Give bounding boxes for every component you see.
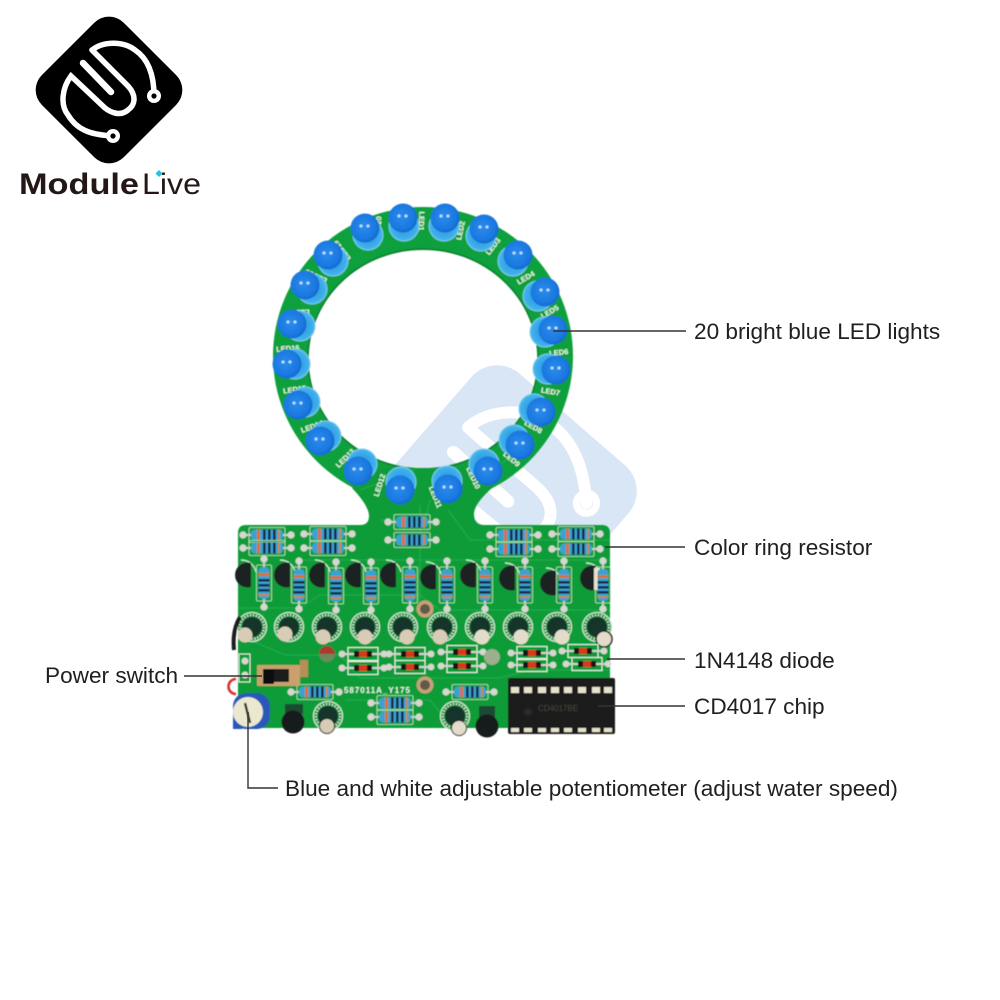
logo wordmark: Module [19, 168, 139, 201]
white tab by last transistor [594, 568, 600, 590]
LED labels: LED10 [464, 465, 482, 490]
LED labels: LED15 [282, 383, 307, 396]
product: PCB with LED ring [229, 204, 615, 738]
neck resistors [384, 514, 440, 548]
PCB board [238, 468, 610, 728]
LED labels: LED13 [334, 447, 357, 470]
black wire [234, 617, 240, 650]
LED labels: LED9 [501, 449, 522, 469]
lower horizontal resistors [287, 684, 498, 724]
board holes and copper rings [319, 600, 500, 694]
LED labels: LED4 [515, 269, 537, 287]
PCB ring inner shade [308, 249, 538, 469]
LED labels: LED1 [417, 211, 426, 231]
board marking: 587011A_Y175 [344, 686, 411, 695]
LED labels: LED7 [540, 385, 561, 398]
PCB ring [273, 207, 573, 505]
capacitor row [238, 612, 612, 647]
LED ring: 20 blue LEDs [272, 204, 570, 504]
diodes [339, 644, 611, 674]
transistor row [235, 560, 601, 596]
LED labels: LED11 [427, 485, 444, 509]
potentiometer [233, 693, 270, 729]
label: chip: CD4017 chip [694, 694, 825, 719]
logo cyan dot [155, 170, 163, 177]
LED labels: LED8 [523, 418, 544, 436]
label: LED lights: 20 bright blue LED lights [694, 319, 940, 344]
leader lines [184, 331, 686, 788]
LED labels: LED2 [454, 220, 467, 241]
LED labels: LED3 [484, 236, 502, 257]
logo: ModuleLive [19, 8, 201, 201]
LED labels: LED16 [276, 343, 300, 354]
LED labels: LED17 [286, 308, 310, 317]
LED labels: LED20 [374, 216, 383, 240]
icon: circuit diamond [27, 8, 191, 172]
watermark: faint logo diamond [347, 341, 661, 655]
logo wordmark light: Live [142, 168, 201, 201]
lower transistors and capacitors [282, 702, 498, 738]
PCB traces [238, 440, 610, 725]
vertical resistors [256, 555, 610, 614]
label: resistor: Color ring resistor [694, 535, 873, 560]
LED labels: LED12 [372, 473, 388, 498]
label: potentiometer: Blue and white adjustable potentiometer (adjust water speed) [285, 776, 898, 801]
LED labels: LED5 [539, 303, 560, 321]
LED labels: LED6 [549, 347, 569, 358]
LED labels: LED18 [303, 267, 328, 285]
LED labels [276, 211, 569, 509]
label: power switch: Power switch [45, 663, 178, 688]
CD4017 chip [508, 678, 615, 734]
LED labels: LED19 [331, 239, 353, 263]
CD4017 chip: CD4017BE [538, 704, 578, 713]
label: diode: 1N4148 diode [694, 648, 835, 673]
top resistor pairs [239, 526, 604, 556]
LED labels: LED14 [300, 418, 325, 435]
power switch [239, 654, 308, 686]
red wire [229, 679, 236, 694]
